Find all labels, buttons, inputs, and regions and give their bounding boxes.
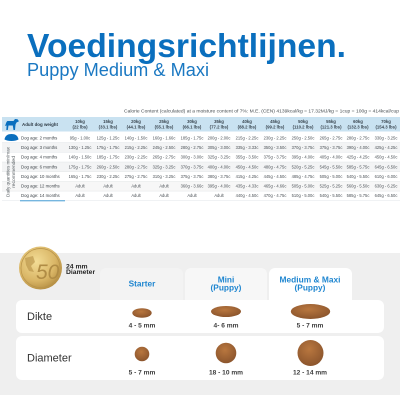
tab: mini: Mini xyxy=(218,274,234,284)
row: 4 months: 405g - 4.00c xyxy=(320,155,342,160)
row: 4 months xyxy=(21,155,397,160)
header row: 10kg xyxy=(75,119,85,124)
header row: (66.1 lbs) xyxy=(183,124,202,130)
row: 6 months: 370g - 3.75c xyxy=(181,164,203,169)
row: 4 months: 265g - 2.75c xyxy=(153,155,175,160)
row: diameter xyxy=(16,336,384,380)
row: 6 months: 325g - 3.25c xyxy=(153,164,175,169)
header row xyxy=(22,119,397,130)
row: 6 months: 260g - 2.50c xyxy=(97,164,119,169)
row: 12 months xyxy=(21,184,397,189)
row: 2 months: 95g - 1.00c xyxy=(70,136,90,141)
row: 2 months: 215g - 2.25c xyxy=(236,136,258,141)
row: 14 months: 440g - 4.50c xyxy=(236,193,258,198)
row: 3 months: 245g - 2.50c xyxy=(153,145,175,150)
row: 12 months: 525g - 5.25c xyxy=(320,184,342,189)
row: 10 months: 310g - 3.25c xyxy=(153,174,175,179)
row: 6 months: Dog age: 6 months xyxy=(21,164,57,169)
header row: 15kg xyxy=(103,119,113,124)
row: 2 months: 230g - 2.25c xyxy=(264,136,286,141)
vertical axis label: Daily quantities min/max xyxy=(6,146,10,197)
row: diameter: 18 - 10 mm xyxy=(209,369,243,376)
row: 6 months xyxy=(21,164,397,169)
header row: (132.3 lbs) xyxy=(347,124,369,130)
header row: Adult dog weight xyxy=(22,122,59,127)
row: 3 months: 390g - 4.00c xyxy=(347,145,369,150)
row: 10 months: 275g - 2.75c xyxy=(125,174,147,179)
tab: starter: Starter xyxy=(129,279,156,289)
row: 6 months: 585g - 5.75c xyxy=(347,164,369,169)
header row: (44.1 lbs) xyxy=(127,124,146,130)
row: 12 months: 465g - 4.66c xyxy=(264,184,286,189)
row: 10 months: 505g - 5.00c xyxy=(320,174,342,179)
row: 2 months: 330g - 3.25c xyxy=(375,136,397,141)
header row: 30kg xyxy=(187,119,197,124)
feeding table xyxy=(2,117,400,201)
header row: 55kg xyxy=(326,119,336,124)
row: 4 months: Dog age: 4 months xyxy=(21,155,57,160)
row: 4 months: 450g - 4.50c xyxy=(375,155,397,160)
row: 12 months: 505g - 5.00c xyxy=(292,184,314,189)
row: 6 months: 400g - 4.00c xyxy=(208,164,230,169)
row: 2 months: 125g - 1.25c xyxy=(97,136,119,141)
row: 3 months: 370g - 3.75c xyxy=(292,145,314,150)
row: 14 months: Adult xyxy=(103,193,114,198)
row: 6 months: 450g - 4.50c xyxy=(236,164,258,169)
calorie caption: Calorie Content (calculated) at a moisture content of 7%: M.E. (CEN) 4139kcal/kg = 17.32MJ/kg = 1cup = 100g = 414kcal/cup xyxy=(124,108,399,114)
header row: (77.2 lbs) xyxy=(210,124,229,130)
icon: 50 cent coin xyxy=(19,246,62,290)
coin size label xyxy=(66,264,95,276)
header row: 60kg xyxy=(353,119,363,124)
coin size label: 24 mm xyxy=(66,264,88,270)
header row: (88.2 lbs) xyxy=(238,124,257,130)
header row: 50kg xyxy=(298,119,308,124)
row: 12 months: 395g - 4.00c xyxy=(208,184,230,189)
row: 3 months: 335g - 3.33c xyxy=(236,145,258,150)
row: 2 months: 140g - 1.50c xyxy=(125,136,147,141)
row: 6 months: 645g - 6.50c xyxy=(375,164,397,169)
row: 14 months: Adult xyxy=(75,193,86,198)
row: 2 months: 185g - 1.75c xyxy=(181,136,203,141)
row: 10 months: 230g - 2.25c xyxy=(97,174,119,179)
row: 3 months: 130g - 1.25c xyxy=(69,145,91,150)
row: 14 months: 540g - 5.50c xyxy=(320,193,342,198)
row: 14 months: 585g - 5.75c xyxy=(347,193,369,198)
row: 6 months: 175g - 1.75c xyxy=(69,164,91,169)
vertical axis label line 2: recommended xyxy=(11,155,16,188)
row: 2 months xyxy=(21,136,397,141)
row: 3 months: 175g - 1.75c xyxy=(97,145,119,150)
row: 10 months: 415g - 4.25c xyxy=(236,174,258,179)
row: 4 months: 395g - 4.00c xyxy=(292,155,314,160)
row: 4 months: 300g - 3.00c xyxy=(181,155,203,160)
row: 3 months: Dog age: 3 months xyxy=(21,145,57,150)
panel: kibble comparison xyxy=(0,253,400,395)
row: 12 months: Adult xyxy=(131,184,142,189)
row: 12 months: 560g - 5.50c xyxy=(347,184,369,189)
row: diameter: Diameter xyxy=(27,353,72,365)
row: 4 months: 425g - 4.25c xyxy=(347,155,369,160)
header row: (22 lbs) xyxy=(72,124,88,130)
row: 10 months: 610g - 6.00c xyxy=(375,174,397,179)
row: 14 months: Dog age: 14 months xyxy=(21,193,60,198)
row: 4 months: 355g - 3.50c xyxy=(236,155,258,160)
row: 10 months: 540g - 5.50c xyxy=(347,174,369,179)
header row: 40kg xyxy=(242,119,252,124)
row: 14 months xyxy=(21,193,397,198)
row: 4 months: 230g - 2.25c xyxy=(125,155,147,160)
header row: 35kg xyxy=(214,119,224,124)
row: dikte: 4 - 5 mm xyxy=(129,323,156,330)
row: dikte: 5 - 7 mm xyxy=(297,323,324,330)
row: 4 months: 140g - 1.50c xyxy=(69,155,91,160)
row: 12 months: 630g - 6.25c xyxy=(375,184,397,189)
icon: bowl xyxy=(4,134,18,141)
tab: starter xyxy=(100,268,183,300)
header row: 45kg xyxy=(270,119,280,124)
row: diameter: 12 - 14 mm xyxy=(293,369,327,376)
row: 14 months: Adult xyxy=(131,193,142,198)
row: 6 months: 545g - 5.50c xyxy=(320,164,342,169)
row: 2 months: Dog age: 2 months xyxy=(21,136,57,141)
row: 12 months: 435g - 4.33c xyxy=(236,184,258,189)
row: dikte: 4- 6 mm xyxy=(214,323,239,330)
row: 2 months: 160g - 1.66c xyxy=(153,136,175,141)
row: 3 months: 350g - 3.50c xyxy=(264,145,286,150)
row: 12 months: Dog age: 12 months xyxy=(21,184,60,189)
header row: (154.3 lbs) xyxy=(375,124,397,130)
row: 14 months: Adult xyxy=(159,193,170,198)
row: 12 months: Adult xyxy=(159,184,170,189)
row: 3 months: 425g - 4.25c xyxy=(375,145,397,150)
row: 6 months: 520g - 5.25c xyxy=(292,164,314,169)
header row: (121.3 lbs) xyxy=(320,124,342,130)
coin size label: Diameter xyxy=(66,269,95,276)
header row: (110.2 lbs) xyxy=(293,124,314,130)
row: 2 months: 200g - 2.00c xyxy=(208,136,230,141)
header row: (55.1 lbs) xyxy=(155,124,174,130)
row: 14 months: Adult xyxy=(187,193,198,198)
tab: mini: (Puppy) xyxy=(211,283,242,293)
row: 3 months xyxy=(21,145,397,150)
subtitle: Puppy Medium & Maxi xyxy=(27,60,209,80)
row: 6 months: 280g - 2.75c xyxy=(125,164,147,169)
row: 3 months: 375g - 3.75c xyxy=(320,145,342,150)
row: 2 months: 265g - 2.75c xyxy=(320,136,342,141)
row: 10 months: 445g - 4.50c xyxy=(264,174,286,179)
row: 12 months: Adult xyxy=(75,184,86,189)
row: 10 months: 485g - 4.75c xyxy=(292,174,314,179)
icon: dog xyxy=(5,119,19,130)
row: 4 months: 325g - 3.25c xyxy=(208,155,230,160)
row: 12 months: Adult xyxy=(103,184,114,189)
title: Voedingsrichtlijnen. xyxy=(27,28,346,65)
row: 14 months: 510g - 5.00c xyxy=(292,193,314,198)
row: 14 months: 470g - 4.75c xyxy=(264,193,286,198)
header row: 20kg xyxy=(131,119,141,124)
header row: (99.2 lbs) xyxy=(266,124,285,130)
row: 6 months: 480g - 4.75c xyxy=(264,164,286,169)
icon: 50 cent coin: 50 xyxy=(36,261,60,284)
row: 14 months: Adult xyxy=(214,193,225,198)
row: 3 months: 305g - 3.00c xyxy=(208,145,230,150)
row: 10 months: 165g - 1.75c xyxy=(69,174,91,179)
row: 2 months: 250g - 2.50c xyxy=(292,136,314,141)
row: 10 months: 380g - 3.75c xyxy=(208,174,230,179)
row: dikte: Dikte xyxy=(27,311,52,323)
row: 10 months: 375g - 3.75c xyxy=(181,174,203,179)
tab: medium and maxi: Medium & Maxi xyxy=(280,274,340,284)
row: 3 months: 280g - 2.75c xyxy=(181,145,203,150)
row: 12 months: 360g - 3.66c xyxy=(181,184,203,189)
row: 10 months: Dog age: 10 months xyxy=(21,174,60,179)
row: 2 months: 280g - 2.75c xyxy=(347,136,369,141)
header row: (33.1 lbs) xyxy=(99,124,118,130)
tab: mini xyxy=(185,268,267,300)
tab: medium and maxi: (Puppy) xyxy=(295,283,326,293)
header row: 70kg xyxy=(381,119,391,124)
row: 3 months: 215g - 2.25c xyxy=(125,145,147,150)
header row: 25kg xyxy=(159,119,169,124)
row: 4 months: 375g - 3.75c xyxy=(264,155,286,160)
tab: medium and maxi xyxy=(269,268,352,300)
row: 10 months xyxy=(21,174,397,179)
row: dikte xyxy=(16,300,384,333)
row: diameter: 5 - 7 mm xyxy=(129,369,156,376)
row: 14 months: 645g - 6.50c xyxy=(375,193,397,198)
row: 4 months: 185g - 1.75c xyxy=(97,155,119,160)
